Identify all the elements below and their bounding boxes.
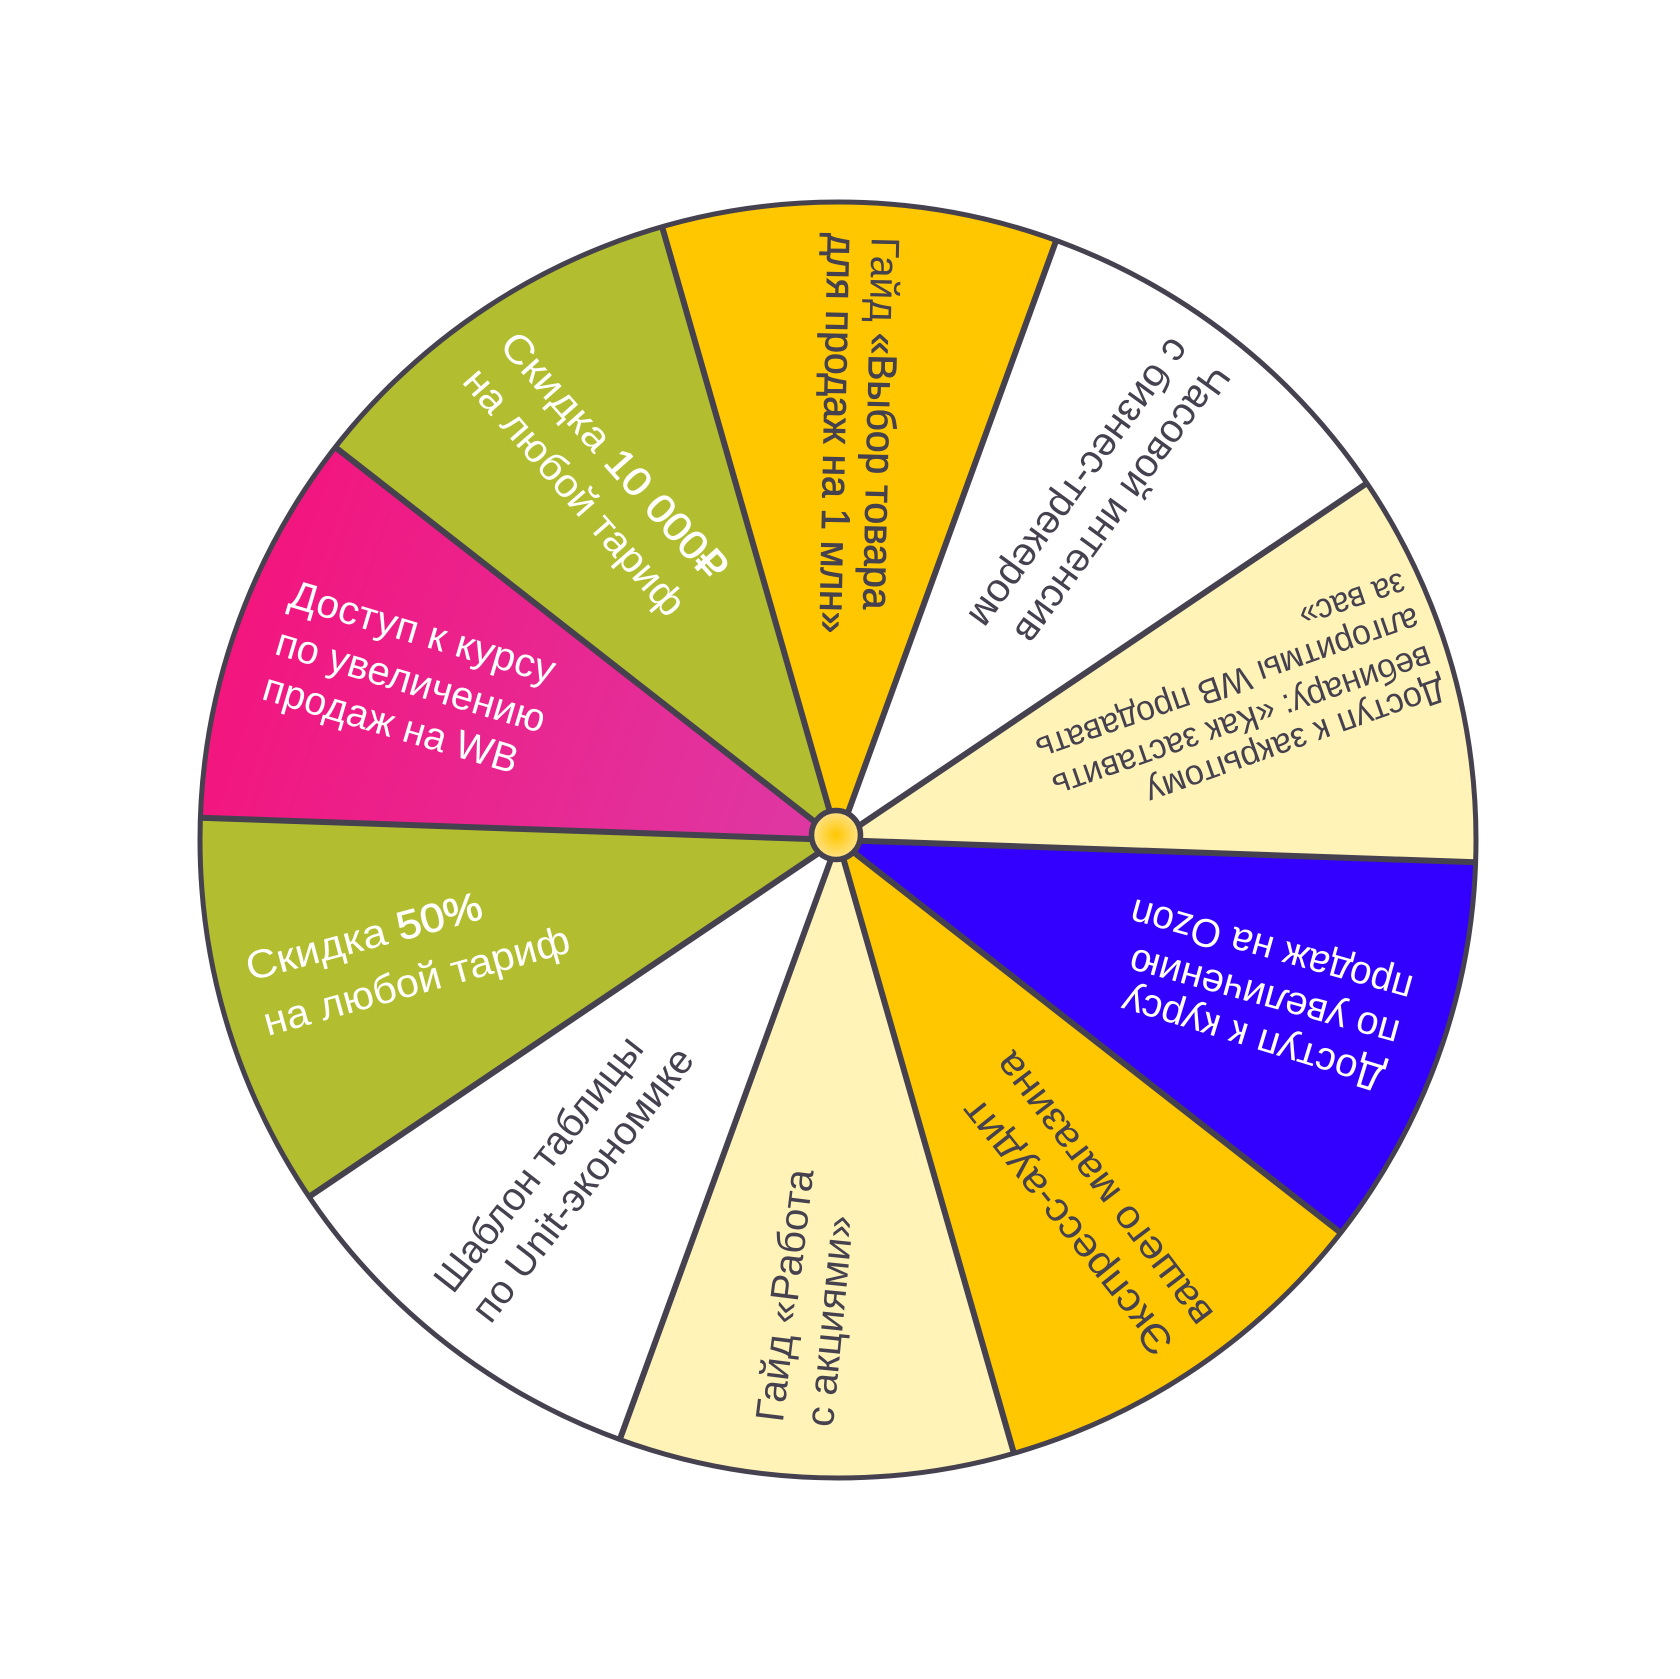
sector: 50 percent discount (200, 818, 838, 1197)
sector: promotions guide (620, 840, 1014, 1478)
sector: guide on choosing a product: для продаж на 1 млн» (811, 233, 863, 634)
sector: express store audit: Экспресс-аудит (952, 1090, 1183, 1364)
sector: closed webinar access: за вас» (1294, 564, 1411, 637)
sector: 10000 rouble discount: Скидка 10 000₽ (491, 323, 736, 590)
sector: express store audit: вашего магазина (985, 1043, 1222, 1335)
sector: Ozon sales course (838, 840, 1476, 1233)
sector: Ozon sales course: по увеличению (1124, 939, 1404, 1055)
sector: unit economics template (309, 840, 838, 1440)
sector: guide on choosing a product: Гайд «Выбор товара (854, 236, 907, 611)
sector: WB sales course: продаж на WB (258, 665, 523, 782)
sector: WB sales course (200, 447, 838, 840)
sector: closed webinar access: алгоритмы WB продавать (1031, 599, 1425, 769)
sector: 10000 rouble discount: на любой тариф (454, 359, 694, 625)
sector: express store audit (838, 840, 1341, 1453)
sector: unit economics template: по Unit-экономике (463, 1039, 703, 1331)
sector: hour-long intensive with a tracker: с бизнес-трекером (960, 330, 1199, 636)
sector: closed webinar access (838, 483, 1476, 862)
sector: 50 percent discount: Скидка 50% (241, 884, 487, 990)
sector: guide on choosing a product (662, 202, 1056, 840)
sector: hour-long intensive with a tracker (838, 240, 1367, 840)
sector: WB sales course: по увеличению (271, 620, 551, 742)
sector: closed webinar access: Доступ к закрытому (1140, 669, 1451, 813)
spokes and outer rim (200, 202, 1476, 1478)
sector: Ozon sales course: продаж на Ozon (1125, 890, 1417, 1011)
sector: closed webinar access: вебинару: «Как заставить (1047, 637, 1437, 806)
sector: 50 percent discount: на любой тариф (258, 918, 575, 1045)
sector: unit economics template: Шаблон таблицы (425, 1028, 652, 1301)
sector: promotions guide: с акциями» (798, 1213, 862, 1429)
sector: promotions guide: Гайд «Работа (748, 1166, 823, 1424)
sector: WB sales course: Доступ к курсу (284, 572, 561, 693)
sector: hour-long intensive with a tracker: Часовой интенсив (1006, 355, 1238, 652)
sector: Ozon sales course: Доступ к курсу (1116, 979, 1389, 1100)
sector: 10000 rouble discount (335, 227, 838, 840)
center hub (812, 810, 860, 860)
